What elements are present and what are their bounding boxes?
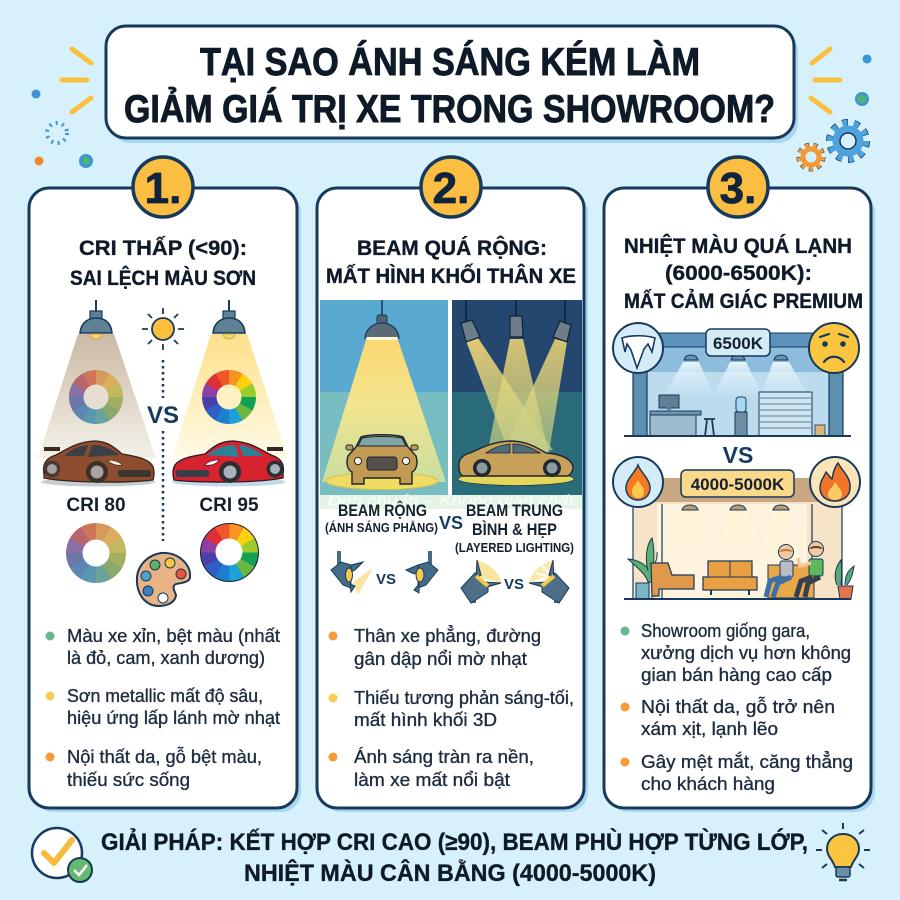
colour wheel vivid centre <box>216 384 242 410</box>
bullet list panel 1: Sơn metallic mất độ sâu, <box>67 686 263 706</box>
icon: icicles <box>613 323 663 373</box>
bullet list panel 3: xưởng dịch vụ hơn không <box>641 643 851 663</box>
bullet list panel 3: cho khách hàng <box>641 774 775 794</box>
VS label panel 1: VS <box>147 402 179 429</box>
colour wheel vivid in beam <box>202 370 256 424</box>
panel: CRI thấp <box>29 188 301 812</box>
icon: small wide spotlights: VS <box>376 571 396 588</box>
heading panel 2: BEAM QUÁ RỘNG: <box>357 236 547 260</box>
bullet list panel 2: Thiếu tương phản sáng-tối, <box>354 688 574 708</box>
beam scene left: wide beam <box>320 300 448 496</box>
icon: check badges <box>32 828 92 882</box>
label CRI 95: CRI 95 <box>199 495 259 516</box>
bullet list panel 1: hiệu ứng lấp lánh mờ nhạt <box>67 708 280 728</box>
colour wheel vivid lower centre <box>216 538 242 566</box>
conclusion text: GIẢI PHÁP: KẾT HỢP CRI CAO (≥90), BEAM PHÙ HỢP TỪNG LỚP, <box>101 827 808 856</box>
number badge 1 <box>133 157 193 217</box>
heading panel 3: NHIỆT MÀU QUÁ LẠNH <box>624 234 852 258</box>
icon: sad face <box>809 323 859 373</box>
bullet list panel 3: Gây mệt mắt, căng thẳng <box>641 751 853 772</box>
CRI 80 lamp and beam <box>38 300 156 458</box>
label beam rộng: BEAM RỘNG <box>338 501 427 520</box>
icon: palette <box>137 553 190 606</box>
title box: GIẢM GIÁ TRỊ XE TRONG SHOWROOM? <box>124 87 775 131</box>
sparks and gears decoration <box>32 49 872 168</box>
title box <box>106 26 798 143</box>
VS label panel 3: VS <box>723 442 753 468</box>
heading panel 3: MẤT CẢM GIÁC PREMIUM <box>624 290 863 313</box>
icon: light bulb <box>816 823 870 880</box>
colour wheel dull centre <box>84 384 108 410</box>
bullet list panel 2: Thân xe phẳng, đường <box>354 625 541 646</box>
label 4000-5000K <box>681 470 794 497</box>
icon: small medium and narrow spotlights <box>461 560 569 603</box>
watermark strip: Đèn chuẩn – Không gian chất <box>328 492 575 508</box>
bullet list panel 2: mất hình khối 3D <box>354 710 497 730</box>
icon: flame drop <box>613 457 663 507</box>
VS label panel 2: VS <box>439 513 463 533</box>
car: brown CRI 80 <box>41 441 155 486</box>
watermark strip <box>320 492 582 509</box>
bullet list panel 2 <box>328 625 574 790</box>
number badge 3 <box>708 157 768 217</box>
car: red CRI 95 <box>172 441 286 486</box>
heading panel 3 <box>624 234 863 313</box>
dotted divider <box>162 360 164 541</box>
icon: fire <box>810 457 860 507</box>
label 4000-5000K: 4000-5000K <box>691 475 785 494</box>
bullet list panel 1: Nội thất da, gỗ bệt màu, <box>67 746 262 767</box>
label 6500K: 6500K <box>713 334 764 353</box>
conclusion text <box>101 827 808 887</box>
panel: beam quá rộng <box>317 188 588 812</box>
label beam trung bình và hẹp: BÌNH & HẸP <box>472 520 557 539</box>
beam scene right: layered spots <box>452 300 582 496</box>
number badge 2 <box>421 157 481 217</box>
title box: TẠI SAO ÁNH SÁNG KÉM LÀM <box>200 40 700 84</box>
bullet list panel 3: gian bán hàng cao cấp <box>641 665 832 685</box>
number badge 1: 1. <box>145 164 181 213</box>
colour wheel dull lower centre <box>82 540 110 566</box>
label 6500K <box>706 329 770 356</box>
colour wheel dull in beam <box>69 370 123 424</box>
bullet list panel 1: thiếu sức sống <box>67 770 190 790</box>
label beam rộng: (ÁNH SÁNG PHẲNG) <box>325 520 438 535</box>
label beam trung bình và hẹp <box>455 501 574 555</box>
scene: cold showroom 6500K <box>624 333 851 436</box>
conclusion text: NHIỆT MÀU CÂN BẰNG (4000-5000K) <box>244 859 656 887</box>
bullet list panel 1: là đỏ, cam, xanh dương) <box>67 648 265 668</box>
bullet list panel 1: Màu xe xỉn, bệt màu (nhất <box>67 626 280 646</box>
scene: warm showroom 4000-5000K <box>624 478 854 599</box>
bullet list panel 3: Showroom giống gara, <box>641 621 810 641</box>
label CRI 80: CRI 80 <box>66 495 126 516</box>
label beam trung bình và hẹp: BEAM TRUNG <box>466 501 563 520</box>
bullet list panel 2: làm xe mất nổi bật <box>354 770 510 790</box>
bullet list panel 2: gân dập nổi mờ nhạt <box>354 649 527 669</box>
panel: nhiệt màu quá lạnh <box>604 188 875 812</box>
bullet list panel 1 <box>46 626 280 790</box>
colour wheel dull lower <box>66 523 126 583</box>
heading panel 2 <box>326 236 576 288</box>
icon: small medium and narrow spotlights: VS <box>504 576 524 593</box>
heading panel 2: MẤT HÌNH KHỐI THÂN XE <box>326 264 576 288</box>
bullet list panel 2: Ánh sáng tràn ra nền, <box>354 747 534 767</box>
heading panel 1: SAI LỆCH MÀU SƠN <box>70 266 256 290</box>
heading panel 1: CRI THẤP (<90): <box>79 237 247 260</box>
icon: small wide spotlights <box>331 551 438 595</box>
label beam rộng <box>325 501 438 535</box>
number badge 2: 2. <box>433 164 469 213</box>
heading panel 3: (6000-6500K): <box>665 262 812 285</box>
bullet list panel 3: Nội thất da, gỗ trở nên <box>641 696 835 717</box>
icon: sun <box>142 308 184 350</box>
CRI 95 lamp and beam <box>172 300 288 458</box>
label beam trung bình và hẹp: (LAYERED LIGHTING) <box>455 541 574 555</box>
heading panel 1 <box>70 237 256 290</box>
colour wheel vivid lower <box>200 523 259 582</box>
bullet list panel 3: xám xịt, lạnh lẽo <box>641 719 778 739</box>
bullet list panel 3 <box>620 621 853 794</box>
number badge 3: 3. <box>720 164 756 213</box>
